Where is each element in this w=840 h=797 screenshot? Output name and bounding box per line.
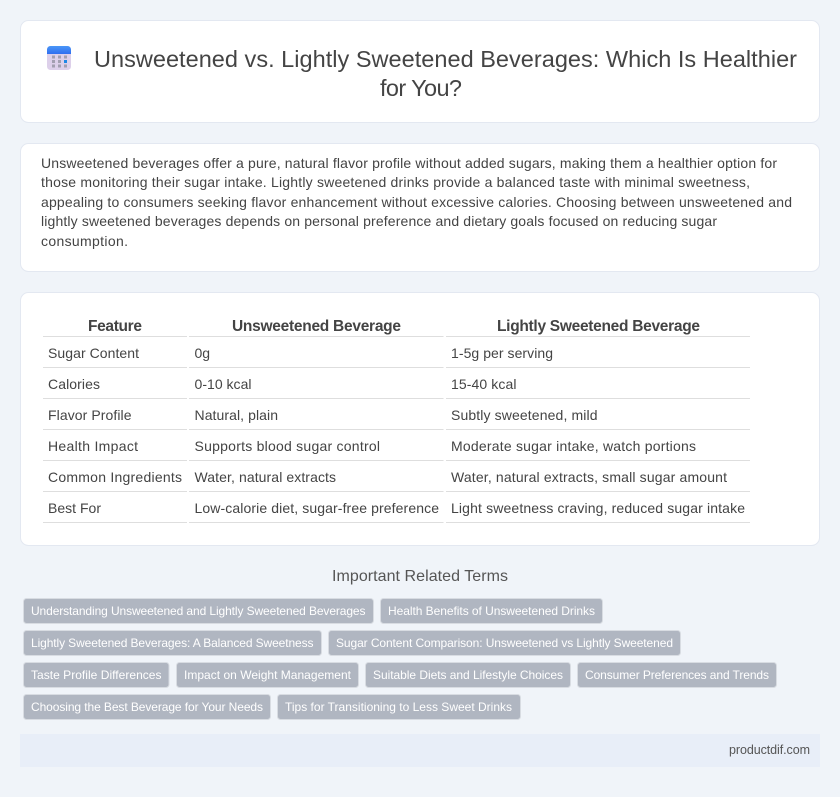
tag: Impact on Weight Management [184, 668, 352, 682]
row: health impact: Moderate sugar intake, watch portions [451, 438, 696, 454]
table header [88, 318, 700, 335]
row: calories: Calories [48, 376, 100, 392]
tag [176, 662, 358, 688]
tag [24, 694, 270, 720]
tag: Lightly Sweetened Beverages: A Balanced Sweetness [31, 636, 314, 650]
tag: Suitable Diets and Lifestyle Choices [373, 668, 563, 682]
description text: appealing to consumers seeking flavor enhancement without excessive calories. Choosing between unsweetened and [41, 194, 792, 210]
row: health impact: Supports blood sugar control [194, 438, 380, 454]
table header: Unsweetened Beverage [232, 318, 401, 335]
row: calories [48, 376, 516, 392]
row: sugar content: Sugar Content [48, 345, 139, 361]
tag: Choosing the Best Beverage for Your Needs [31, 700, 263, 714]
title: for You? [380, 75, 462, 101]
row: best for [48, 500, 745, 516]
footer source text: productdif.com [729, 743, 810, 757]
row: calories: 15-40 kcal [451, 376, 516, 392]
row: sugar content: 1-5g per serving [451, 345, 553, 361]
tag [24, 598, 374, 624]
tag [24, 662, 169, 688]
tag: Consumer Preferences and Trends [585, 668, 769, 682]
tag: Taste Profile Differences [31, 668, 162, 682]
tag [328, 630, 680, 656]
panel: description [20, 144, 820, 272]
row: flavor profile: Subtly sweetened, mild [451, 407, 598, 423]
tag [578, 662, 776, 688]
row: common ingredients: Water, natural extracts [194, 469, 336, 485]
tag [366, 662, 570, 688]
panel: title header [20, 20, 820, 122]
description text: lightly sweetened beverages depends on personal preference and dietary goals focused on reducing sugar [41, 213, 717, 229]
row: best for: Light sweetness craving, reduced sugar intake [451, 500, 745, 516]
icon: calendar [47, 46, 71, 70]
title: Unsweetened vs. Lightly Sweetened Beverages: Which Is Healthier [94, 46, 797, 72]
tag: Tips for Transitioning to Less Sweet Drinks [285, 700, 512, 714]
row: sugar content: 0g [194, 345, 210, 361]
description text: those monitoring their sugar intake. Lightly sweetened drinks provide a balanced taste with minimal sweetness, [41, 174, 750, 190]
tag: Health Benefits of Unsweetened Drinks [388, 604, 595, 618]
row: best for: Low-calorie diet, sugar-free preference [194, 500, 439, 516]
row: best for: Best For [48, 500, 101, 516]
table header: Lightly Sweetened Beverage [497, 318, 700, 335]
row: common ingredients [48, 469, 727, 485]
row: health impact [48, 438, 696, 454]
description text [41, 155, 792, 249]
tag [380, 598, 602, 624]
tag [24, 630, 322, 656]
description text: consumption. [41, 233, 128, 249]
panel: footer [20, 734, 820, 767]
row: flavor profile: Natural, plain [194, 407, 278, 423]
tag [278, 694, 520, 720]
panel: comparison table [20, 292, 820, 546]
row: flavor profile [48, 407, 598, 423]
row: health impact: Health Impact [48, 438, 138, 454]
description text: Unsweetened beverages offer a pure, natural flavor profile without added sugars, making them a healthier option for [41, 155, 777, 171]
row: common ingredients: Common Ingredients [48, 469, 182, 485]
panel: related term tags [24, 598, 776, 720]
heading: important related terms: Important Related Terms [332, 568, 508, 585]
row: flavor profile: Flavor Profile [48, 407, 132, 423]
row: calories: 0-10 kcal [194, 376, 252, 392]
tag: Understanding Unsweetened and Lightly Sweetened Beverages [31, 604, 366, 618]
tag: Sugar Content Comparison: Unsweetened vs Lightly Sweetened [336, 636, 673, 650]
row: common ingredients: Water, natural extracts, small sugar amount [451, 469, 727, 485]
title [94, 46, 797, 101]
row: sugar content [48, 345, 553, 361]
table header: Feature [88, 318, 142, 335]
